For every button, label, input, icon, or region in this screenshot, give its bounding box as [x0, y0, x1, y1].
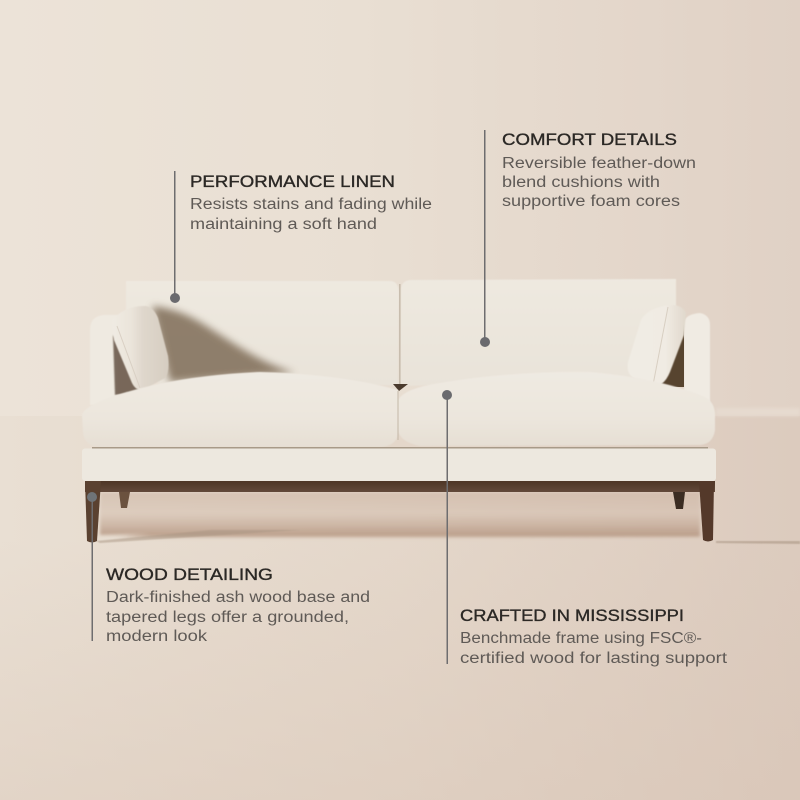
heading: WOOD DETAILING — [106, 565, 273, 584]
leader line and dot — [170, 171, 180, 303]
centre gap between back cushions — [399, 284, 401, 384]
base upholstery — [82, 448, 716, 481]
body text — [460, 630, 728, 667]
heading: PERFORMANCE LINEN — [190, 172, 395, 191]
body text: maintaining a soft hand — [190, 216, 377, 233]
left seat cushion — [82, 372, 398, 447]
body text: Reversible feather-down — [502, 155, 696, 172]
body text: blend cushions with — [502, 174, 660, 191]
pillow shadow on back cushion — [152, 306, 295, 382]
right arm inner shadow — [658, 311, 684, 387]
back cushion: right — [400, 279, 676, 386]
right pillow — [628, 305, 686, 386]
left front leg — [85, 481, 101, 542]
body text: Dark-finished ash wood base and — [106, 589, 370, 606]
callout: performance linen — [170, 171, 432, 303]
body text: Resists stains and fading while — [190, 196, 432, 213]
wood rail — [85, 481, 715, 492]
body text: supportive foam cores — [502, 193, 680, 210]
heading: CRAFTED IN MISSISSIPPI — [460, 606, 684, 625]
callout: crafted in mississippi — [442, 390, 728, 667]
body text: Benchmade frame using FSC®- — [460, 630, 702, 647]
sofa — [82, 279, 716, 542]
right pillow seam — [653, 307, 668, 385]
body text: modern look — [106, 628, 207, 645]
floor shadow beneath sofa — [96, 492, 800, 544]
body text: tapered legs offer a grounded, — [106, 609, 349, 626]
body text: certified wood for lasting support — [460, 650, 728, 667]
gap between seat cushions — [397, 391, 399, 440]
body text — [106, 589, 370, 645]
leader line and dot — [480, 130, 490, 347]
right seat cushion — [398, 372, 715, 446]
heading: COMFORT DETAILS — [502, 130, 677, 149]
leader line and dot — [87, 492, 97, 641]
body text — [190, 196, 432, 233]
seat shadow line — [92, 447, 708, 449]
left arm — [90, 315, 118, 405]
left arm inner shadow — [113, 335, 145, 395]
back legs — [119, 492, 130, 508]
callout: wood detailing — [87, 492, 370, 645]
right front leg — [699, 481, 714, 542]
left pillow seam — [117, 326, 140, 388]
dark gap at sofa centre — [393, 384, 408, 391]
leader line and dot — [442, 390, 452, 664]
left pillow — [112, 306, 169, 390]
body text — [502, 155, 696, 210]
callout: comfort details — [480, 130, 696, 347]
right arm — [684, 313, 710, 402]
back cushion: left — [126, 281, 399, 385]
